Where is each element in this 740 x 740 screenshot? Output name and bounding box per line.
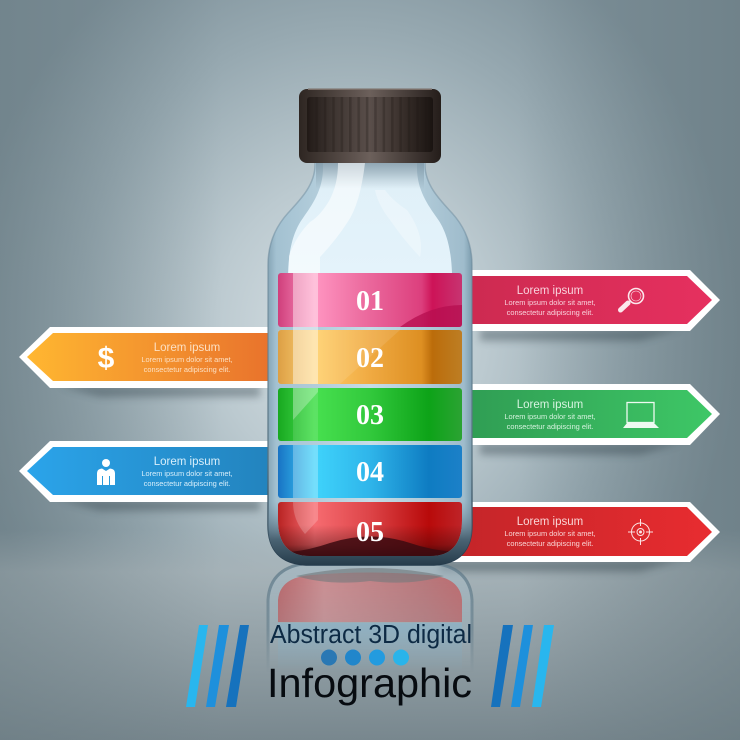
arrow 3: red right — [430, 502, 720, 562]
icon: magnifier — [620, 288, 644, 310]
band 04 — [278, 445, 462, 498]
band 03 — [278, 388, 462, 441]
arrow 1 text: consectetur adipiscing elit. — [507, 308, 593, 317]
band 04: 04 — [356, 457, 384, 488]
arrow 3 text: Lorem ipsum dolor sit amet, — [504, 529, 596, 538]
inner glass — [288, 163, 452, 273]
arrow 2 text: Lorem ipsum — [517, 399, 583, 411]
arrow 4 text: consectetur adipiscing elit. — [144, 365, 230, 374]
bottle — [268, 88, 472, 565]
arrow 5 text: consectetur adipiscing elit. — [144, 479, 230, 488]
title line 2: Infographic — [267, 660, 472, 706]
icon: dollar: $ — [98, 342, 115, 375]
arrow 4 text: Lorem ipsum — [154, 342, 220, 354]
arrow 3 text: consectetur adipiscing elit. — [507, 539, 593, 548]
left side highlights — [293, 273, 318, 534]
arrow 2 text: consectetur adipiscing elit. — [507, 422, 593, 431]
band 01 — [278, 273, 462, 327]
band 02 — [278, 330, 462, 384]
title line 1: Abstract 3D digital — [270, 621, 472, 649]
cap — [299, 88, 441, 163]
bottle reflection — [266, 564, 474, 659]
band 01: 01 — [356, 286, 384, 317]
band 05: 05 — [356, 517, 384, 548]
arrow 1: pink right — [460, 270, 720, 331]
band 05 — [278, 502, 462, 558]
right blue stripes — [491, 625, 554, 707]
arrow 2: green right — [460, 384, 720, 445]
neck shading — [316, 163, 424, 189]
arrow 1 text: Lorem ipsum dolor sit amet, — [504, 298, 596, 307]
arrow shadows — [60, 329, 680, 572]
icon: laptop — [623, 402, 659, 428]
arrow 4 text: Lorem ipsum dolor sit amet, — [141, 355, 233, 364]
icon: target — [628, 519, 653, 545]
left blue stripes — [186, 625, 249, 707]
band 02: 02 — [356, 343, 384, 374]
arrow 1 text: Lorem ipsum — [517, 285, 583, 297]
icon: person — [97, 459, 115, 485]
arrow 4: orange left — [19, 327, 280, 388]
band 03: 03 — [356, 400, 384, 431]
four dots — [321, 650, 409, 666]
arrow 2 text: Lorem ipsum dolor sit amet, — [504, 412, 596, 421]
arrow 5: blue left — [19, 441, 280, 502]
glass body — [268, 160, 472, 565]
bottom rim — [268, 500, 472, 565]
arrow 5 text: Lorem ipsum dolor sit amet, — [141, 469, 233, 478]
glass highlights — [289, 163, 421, 273]
arrow 3 text: Lorem ipsum — [517, 516, 583, 528]
arrow 5 text: Lorem ipsum — [154, 456, 220, 468]
